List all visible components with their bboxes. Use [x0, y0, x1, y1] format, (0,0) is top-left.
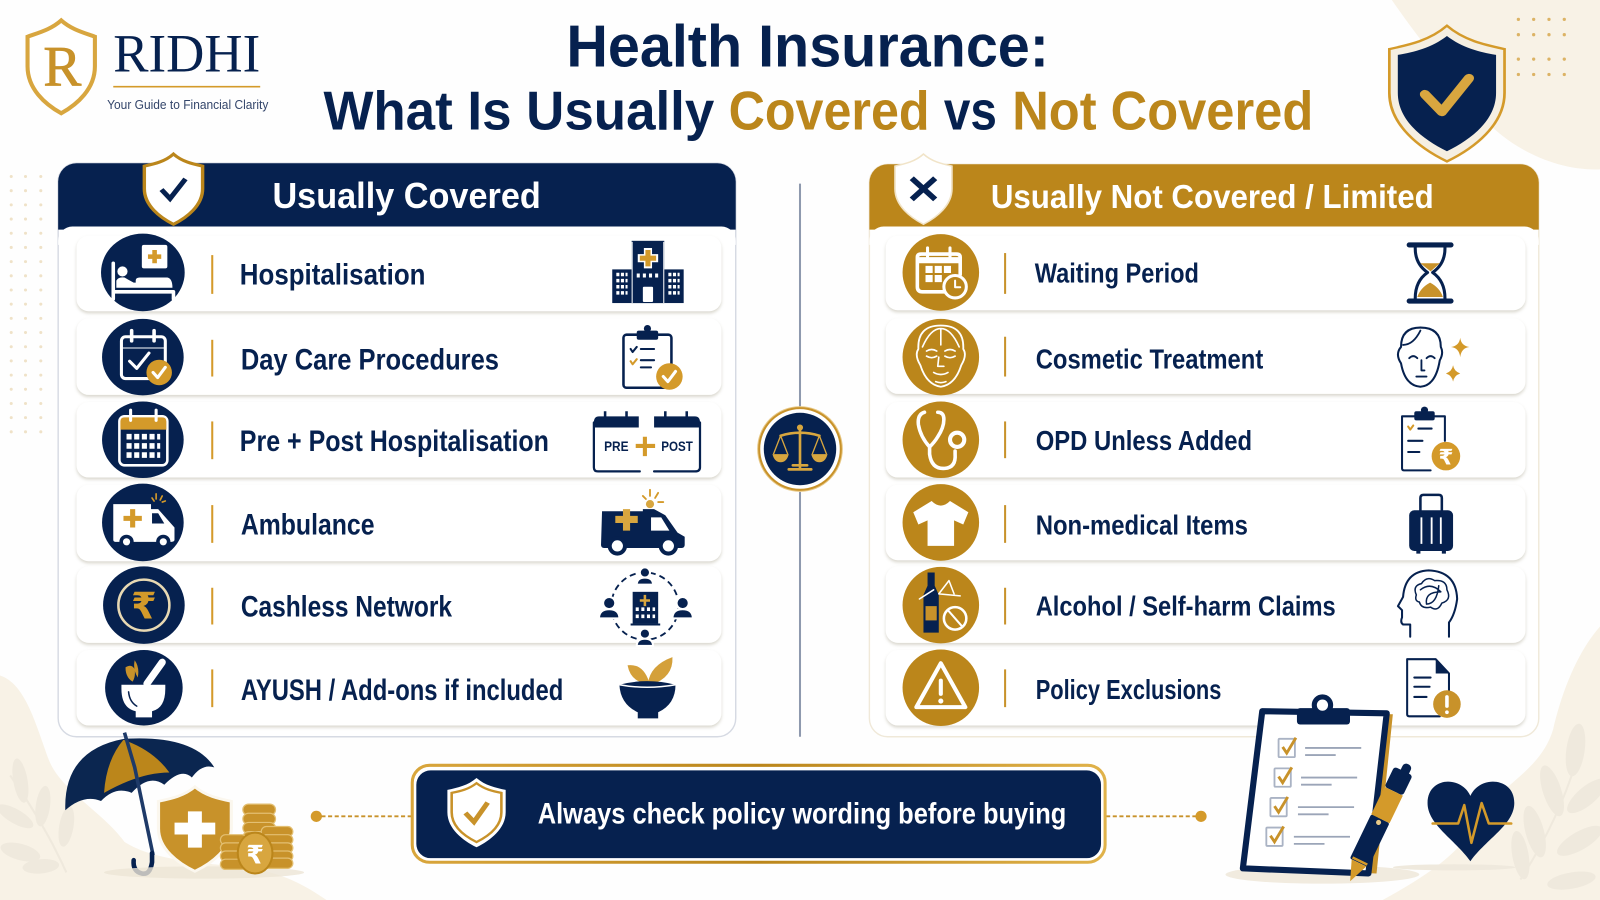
- label: AYUSH / Add-ons if included: [241, 674, 563, 707]
- icon: rupee ring: ₹: [131, 584, 157, 627]
- icon: hospital bed: [101, 234, 185, 311]
- icon: document alert: [1407, 659, 1461, 718]
- label: Hospitalisation: [240, 259, 426, 292]
- logo: [28, 20, 269, 113]
- icon: ambulance navy: [601, 490, 685, 554]
- covered heading: Usually Covered: [272, 176, 541, 216]
- row: AYUSH / Add-ons: [77, 650, 721, 726]
- connector right: [1106, 811, 1207, 822]
- row: Day Care Procedures: [77, 318, 721, 395]
- title line 2: Not Covered: [1012, 80, 1313, 142]
- background blob: bottom right: [1383, 627, 1600, 900]
- icon: clipboard and pen: [1226, 697, 1419, 886]
- covered header shield: [144, 154, 203, 224]
- not covered header shield: [895, 154, 952, 224]
- icon: hospital: [612, 241, 684, 303]
- title: [323, 12, 1313, 142]
- icon: rupee ring: [103, 566, 185, 644]
- row: Waiting Period: [886, 234, 1526, 311]
- icon: herbal bowl: [619, 657, 676, 718]
- icon: pre + post calendars: PRE: [604, 439, 629, 455]
- label: Non-medical Items: [1036, 510, 1248, 541]
- icon: calendar grid: [102, 402, 184, 478]
- label: OPD Unless Added: [1036, 425, 1252, 456]
- logo wordmark: RIDHI: [113, 23, 260, 83]
- icon: warning triangle: [903, 649, 979, 726]
- icon: clipboard rupee: ₹: [1438, 445, 1453, 470]
- label: Pre + Post Hospitalisation: [240, 425, 549, 458]
- background blob: top right: [1392, 0, 1600, 169]
- label: Ambulance: [241, 509, 374, 542]
- icon: coin stacks: [220, 804, 293, 873]
- row: Cosmetic Treatment: [886, 318, 1526, 395]
- shadow under shield and coins: [104, 866, 304, 879]
- icon: mortar and pestle: [105, 650, 183, 726]
- icon: umbrella: [65, 733, 214, 874]
- panel: usually not covered: [869, 154, 1539, 737]
- logo shield: R: [43, 36, 82, 99]
- icon: scales medallion: [757, 406, 843, 492]
- not covered heading: Usually Not Covered / Limited: [991, 179, 1434, 216]
- icon: t-shirt: [903, 484, 979, 561]
- row: Non-medical Items: [886, 484, 1526, 561]
- icon: heart with pulse: [1393, 782, 1515, 870]
- icon: network: [599, 567, 693, 646]
- icon: clipboard check: [623, 325, 683, 390]
- label: Alcohol / Self-harm Claims: [1036, 590, 1336, 621]
- title line 2: Covered: [729, 80, 930, 142]
- icon: stethoscope: [903, 402, 979, 478]
- row: Alcohol / Self-harm Claims: [886, 566, 1526, 643]
- title line 1: Health Insurance:: [566, 12, 1049, 79]
- icon: face: [903, 319, 979, 395]
- pen: [1341, 759, 1416, 886]
- covered header: [58, 163, 736, 230]
- label: Cosmetic Treatment: [1036, 343, 1263, 374]
- not covered header: [869, 164, 1539, 230]
- icon: hourglass: [1409, 245, 1451, 301]
- connector left: [311, 811, 411, 822]
- label: Cashless Network: [241, 590, 452, 623]
- title line 2: [323, 80, 1313, 142]
- icon: suitcase: [1409, 495, 1453, 552]
- dot pattern: left: [11, 177, 41, 445]
- icon: calendar clock: [903, 234, 979, 311]
- center divider: [799, 184, 801, 737]
- icon: pre + post calendars: [594, 411, 700, 471]
- row: Ambulance: [77, 484, 721, 561]
- label: Waiting Period: [1035, 258, 1199, 289]
- logo tagline: Your Guide to Financial Clarity: [107, 97, 269, 112]
- icon: big shield with check: [1389, 26, 1505, 161]
- icon: medical shield: [158, 787, 231, 871]
- label: Policy Exclusions: [1036, 674, 1221, 705]
- background blob: bottom left: [0, 676, 327, 900]
- icon: pre + post calendars: POST: [661, 439, 693, 455]
- row: Policy Exclusions: [886, 649, 1526, 726]
- icon: ambulance: [102, 484, 184, 561]
- row: Cashless Network: [77, 566, 721, 646]
- decorative leaves: bottom right: [1508, 722, 1600, 893]
- icon: calendar check: [102, 319, 184, 395]
- icon: coin stacks: ₹: [246, 840, 264, 870]
- callout banner: [412, 765, 1105, 862]
- logo shield: [28, 20, 95, 113]
- icon: bottle with prohibition: [903, 567, 979, 643]
- dot pattern: top right: [1517, 18, 1566, 76]
- row: OPD Unless Added: [886, 402, 1526, 478]
- banner text: Always check policy wording before buying: [538, 797, 1066, 830]
- icon: head with brain: [1398, 570, 1457, 637]
- title line 2: vs: [944, 80, 997, 142]
- icon: clipboard rupee: [1402, 407, 1460, 470]
- decorative leaves: bottom left: [0, 757, 77, 875]
- panel: usually covered: [58, 154, 736, 737]
- row: Hospitalisation: [77, 234, 721, 311]
- row: Pre + Post Hospitalisation: [77, 402, 721, 478]
- title line 2: What Is Usually: [323, 80, 715, 142]
- icon: banner shield: [447, 778, 506, 847]
- icon: face with sparkles: [1398, 328, 1469, 387]
- label: Day Care Procedures: [241, 343, 499, 376]
